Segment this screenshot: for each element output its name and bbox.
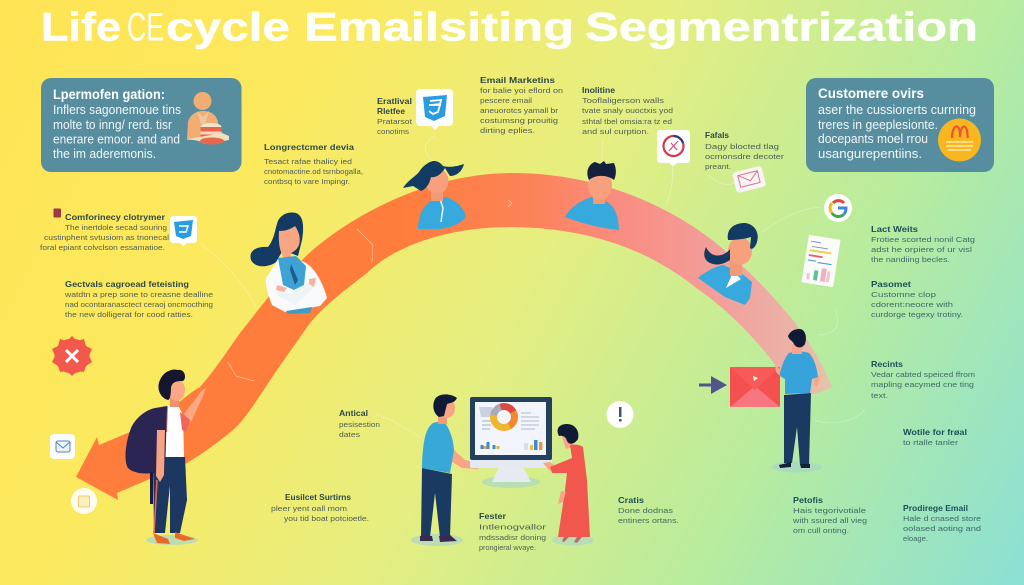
callout: Eusilcet: pleer yent oall mom [271,504,347,513]
title [41,6,978,50]
callout: Antical: pesisestion [339,420,380,429]
callout: Antical [339,408,380,439]
callout: Fester: mdssadisr doning [479,533,546,542]
panel text [818,103,976,161]
panel text: aser the cussiorerts curnring [818,103,976,117]
lifecycle arrow band [76,173,832,500]
callout: Eratlival: Eratlival [377,96,412,106]
callout: Pasomet: curdorge tegexy trotiny. [871,310,963,319]
callout: Gectvals: nad ocontaranasctect ceraoj oncmocthing [65,300,213,309]
callout: Cratis [618,495,679,525]
callout: Petofis: with ssured all vieg [792,516,867,525]
callout: Email Marketins: Email Marketins [480,75,555,85]
panel text: treres in geeplesionte. [818,118,938,132]
callout: Petofis: om cull onting. [793,526,849,535]
callout: Fester: Fester [479,511,507,521]
panel text: usangurepentiins. [818,147,922,161]
title: Life [41,6,121,50]
icon: mail tile [50,434,75,459]
callout: Eratlival: conotims [377,127,409,136]
figure: man at the monitor [411,394,479,546]
callout: Longrectcmer: cnotomactine.od tsrnbogalla, [264,167,363,176]
icon: target tile [657,130,690,166]
callout: Fafals [705,130,785,171]
callout: Pasomet: Customne clop [871,290,936,299]
callout: Petofis: Petofis [793,495,823,505]
callout: Recints [871,359,975,400]
title: Segmentrization [585,6,978,50]
icon: red warning seal [52,336,92,376]
callout: Cratis: Done dodnas [618,506,673,515]
icon: red envelope [730,367,780,407]
callout: Wotile: Wotile for frøal [903,427,967,437]
callout: Inolitine: Inolitine [582,85,615,95]
figure: student with backpack [126,369,206,545]
panel text: Inflers sagonemoue tins [53,103,181,117]
callout: Email Marketins: aneuorotcs yamall br [480,106,559,115]
figure: woman in red dress [543,424,594,546]
icon: blue shield tile [416,89,453,130]
callout: Recints: Vedar cabted speiced ffrom [871,370,975,379]
panel text: molte to inng/ rerd. tisr [53,118,172,132]
callout: Lact Weits: adst he orpiere of ur visl [871,245,972,254]
callout: Wotile [903,427,967,447]
callout: Email Marketins: costumsng prouitig [480,116,558,125]
icon: small shield tile [170,216,197,246]
callout: Gectvals: watdtn a prep sone to creasne dealline [64,290,213,299]
callout: Eusilcet [271,492,369,523]
callout: Inolitine [582,85,673,136]
callout: Email Marketins [480,75,563,135]
callout: Gectvals [64,279,213,319]
callout: Inolitine: sthtal tbel omsia:ra tz ed [582,117,672,126]
callout: Comforinecy [40,208,169,252]
callout: Eratlival: Rletfee [377,106,405,116]
figure: woman with wavy hair [403,161,466,229]
title: Emailsiting [304,6,574,50]
figure: woman with crossed arms [250,212,327,314]
panel heading: Customere ovirs [818,86,924,101]
callout: Pasomet: cdorent:neocre with [871,300,953,309]
icon: Google badge [824,194,852,222]
callout: Recints: Recints [871,359,903,369]
callout: Prodirege Email: Hale d cnased store [903,514,981,523]
callout: Fafals: ocmonsdre decoter [705,152,785,161]
figure: man on the arc [565,161,619,230]
callout: Eratlival [377,96,413,136]
arrow: pointing to envelope [699,376,727,394]
callout: Prodirege Email [903,503,981,543]
callout: Fafals: Fafals [705,130,729,140]
callout: Longrectcmer [264,142,363,186]
callout: Recints: text. [871,391,888,400]
callout: Comforinecy: custinphent svtusiom as tnonecal [44,233,169,242]
callout: Prodirege Email: oolased aoting and [903,524,981,533]
icon: yellow badge [938,118,981,162]
callout: Comforinecy: Comforinecy clotrymer [65,212,166,222]
callout: Inolitine: and sul curption. [582,127,649,136]
panel: right info card [806,78,994,172]
figure: woman with ponytail [698,223,758,305]
panel: left info card [41,78,242,172]
callout: Eratlival: Pratarsot [377,117,413,126]
icon: person with coins [187,92,229,144]
donut chart [490,403,518,431]
callouts: right column [618,224,981,543]
callout: Fafals: preant. [705,162,731,171]
callout: Gectvals: Gectvals cagroead feteisting [65,279,189,289]
panel text: the im aderemonis. [53,147,156,161]
callout: Lact Weits: Frotiee scorted nonil Catg [871,235,975,244]
callout: Email Marketins: pescere email [480,96,532,105]
callout: Inolitine: tvate snaly ouoctxis yod [582,106,673,115]
icon: exclamation badge [606,401,634,428]
callout: Eusilcet: Eusilcet Surtirns [285,492,351,502]
callout: Petofis: Hais tegorivotiale [793,506,866,515]
callout: Comforinecy: The inertdole secad souring [65,223,167,232]
callout: Antical: dates [339,430,360,439]
callout: Eusilcet: you tid boat potcioetle. [284,514,369,523]
chart: monitor with dashboard [470,397,552,488]
callout: Pasomet [871,279,963,319]
callout: Prodirege Email: eloage. [903,534,928,543]
callout: Fester [479,511,547,552]
panel text: docepants moel rrou [818,132,928,146]
callout: Cratis: Cratis [618,495,644,505]
callout: Cratis: entiners ortans. [618,516,679,525]
callout: Wotile: to rtalle tanler [903,438,959,447]
title: CE [127,6,164,50]
panel text: enerare emoor. and and [53,132,180,146]
callout: Fester: Intlenogvallor [479,522,547,532]
callout: Petofis [792,495,867,535]
callout: Inolitine: Tooflaligerson walls [582,96,664,105]
icon: report document [801,235,841,287]
callout: Lact Weits: the nandiing becles. [871,255,950,264]
faint connector lines [200,135,865,438]
callout: Comforinecy: foral epiant colvclson essamatioe. [40,243,165,252]
callout: Longrectcmer: Tesact rafae thalicy ied [264,157,352,166]
callout: Fester: prongieral wvaye. [479,543,536,552]
callout: Longrectcmer: contbsq to vare Impingr. [264,177,350,186]
panel text [53,103,181,161]
figure: man with email [772,329,822,472]
callout: Prodirege Email: Prodirege Email [903,503,968,513]
callout: Fafals: Dagy blocted tlag [705,142,779,151]
callout: Antical: Antical [339,408,368,418]
callout: Lact Weits: Lact Weits [871,224,918,234]
callout: Email Marketins: dirting eplies. [480,126,535,135]
callout: Longrectcmer: Longrectcmer devia [264,142,354,152]
callout: Lact Weits [871,224,975,264]
callout: Email Marketins: for balie yoi eflord on [480,86,563,95]
callout: Pasomet: Pasomet [871,279,911,289]
panel heading: Lpermofen gation: [53,87,165,102]
callout: Recints: mapling eacymed cne ting [871,380,974,389]
icon: tilted envelope [732,166,766,193]
callout: Gectvals: the new dolligerat for cood ratties. [65,310,193,319]
icon: pale badge [71,488,97,514]
title: cycle [166,6,290,50]
